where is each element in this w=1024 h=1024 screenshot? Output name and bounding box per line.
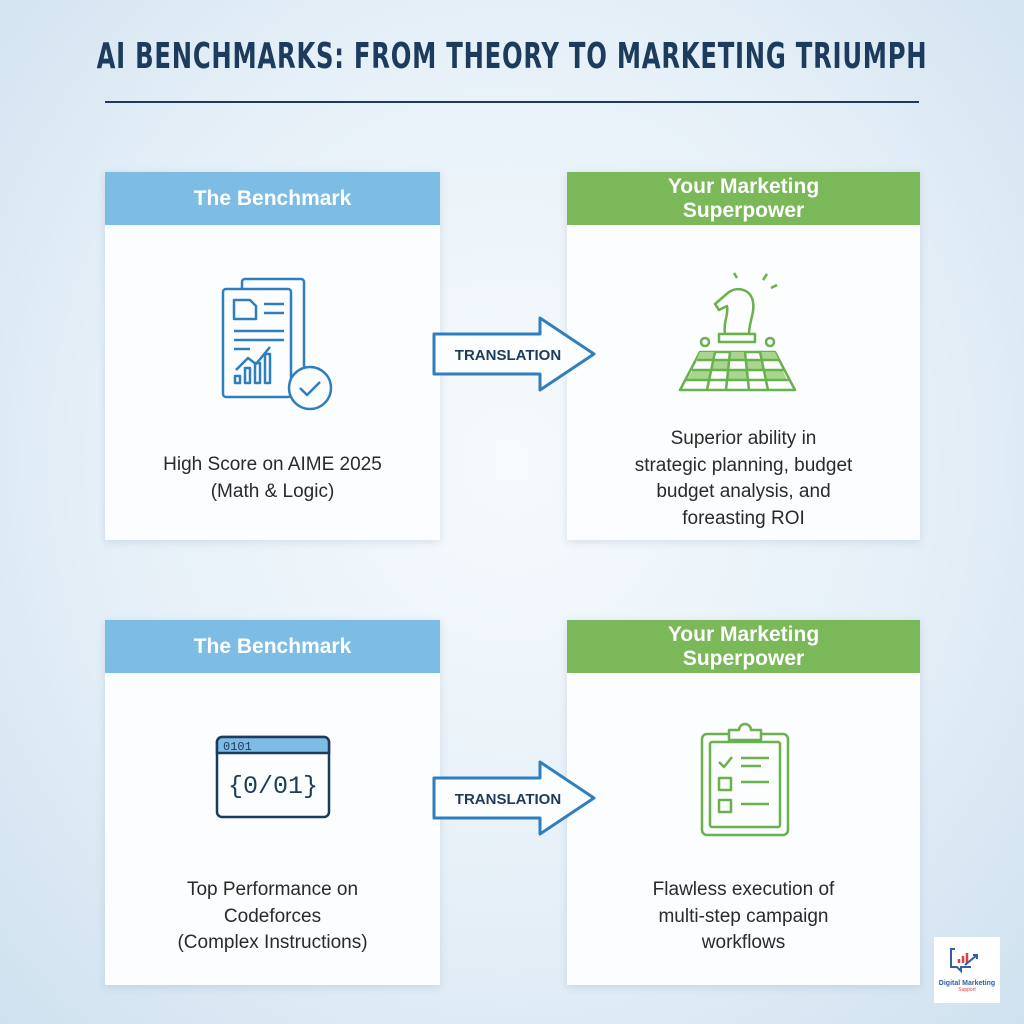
icon: code window: 0101 bbox=[223, 740, 252, 754]
header: benchmark bbox=[105, 172, 440, 225]
panel: superpower 1 bbox=[567, 172, 920, 540]
icon: code window bbox=[216, 736, 330, 818]
header: benchmark: The Benchmark bbox=[194, 634, 351, 658]
arrow: translation 1: TRANSLATION bbox=[455, 347, 561, 364]
header: superpower: Superpower bbox=[683, 198, 804, 222]
logo: digital marketing support bbox=[934, 937, 1000, 1003]
text: benchmark 2: Codeforces bbox=[224, 906, 321, 926]
text: benchmark 2: Top Performance on bbox=[187, 879, 358, 900]
panel: benchmark 2 bbox=[105, 620, 440, 985]
text: benchmark 1: (Math & Logic) bbox=[211, 480, 334, 502]
text: superpower 1: foreasting ROI bbox=[682, 508, 805, 528]
arrow: translation 2: TRANSLATION bbox=[455, 791, 561, 808]
header: superpower: Superpower bbox=[683, 646, 804, 670]
header: benchmark: The Benchmark bbox=[194, 186, 351, 210]
icon: chess knight on board bbox=[678, 272, 796, 392]
text: superpower 2: multi-step campaign bbox=[658, 906, 829, 926]
header: superpower bbox=[567, 620, 920, 673]
logo: digital marketing support: Support bbox=[958, 987, 976, 993]
title: AI BENCHMARKS: FROM THEORY TO MARKETING TRIUMPH bbox=[97, 36, 927, 77]
icon: document with chart bbox=[222, 278, 332, 410]
header: superpower: Your Marketing bbox=[668, 622, 819, 646]
panel: benchmark 1 bbox=[105, 172, 440, 540]
text: superpower 2 bbox=[653, 879, 834, 953]
arrow: translation 1 bbox=[432, 316, 596, 392]
text: superpower 1 bbox=[635, 428, 852, 528]
text: benchmark 1 bbox=[163, 454, 382, 502]
panel: superpower 2 bbox=[567, 620, 920, 985]
text: benchmark 1: High Score on AIME 2025 bbox=[163, 454, 382, 475]
text: benchmark 2: (Complex Instructions) bbox=[177, 932, 368, 953]
text: superpower 1: budget analysis, and bbox=[656, 481, 831, 502]
arrow: translation 2 bbox=[432, 760, 596, 836]
text: benchmark 2 bbox=[177, 879, 368, 953]
icon: code window: {0/01} bbox=[228, 772, 318, 801]
header: superpower bbox=[567, 172, 920, 225]
logo: digital marketing support: Digital Marketing bbox=[939, 980, 995, 987]
header: benchmark bbox=[105, 620, 440, 673]
text: superpower 1: Superior ability in bbox=[671, 428, 816, 449]
icon: clipboard checklist bbox=[700, 722, 790, 836]
text: superpower 2: Flawless execution of bbox=[653, 879, 834, 900]
text: superpower 1: strategic planning, budget bbox=[635, 454, 852, 476]
header: superpower: Your Marketing bbox=[668, 174, 819, 198]
text: superpower 2: workflows bbox=[702, 932, 785, 953]
